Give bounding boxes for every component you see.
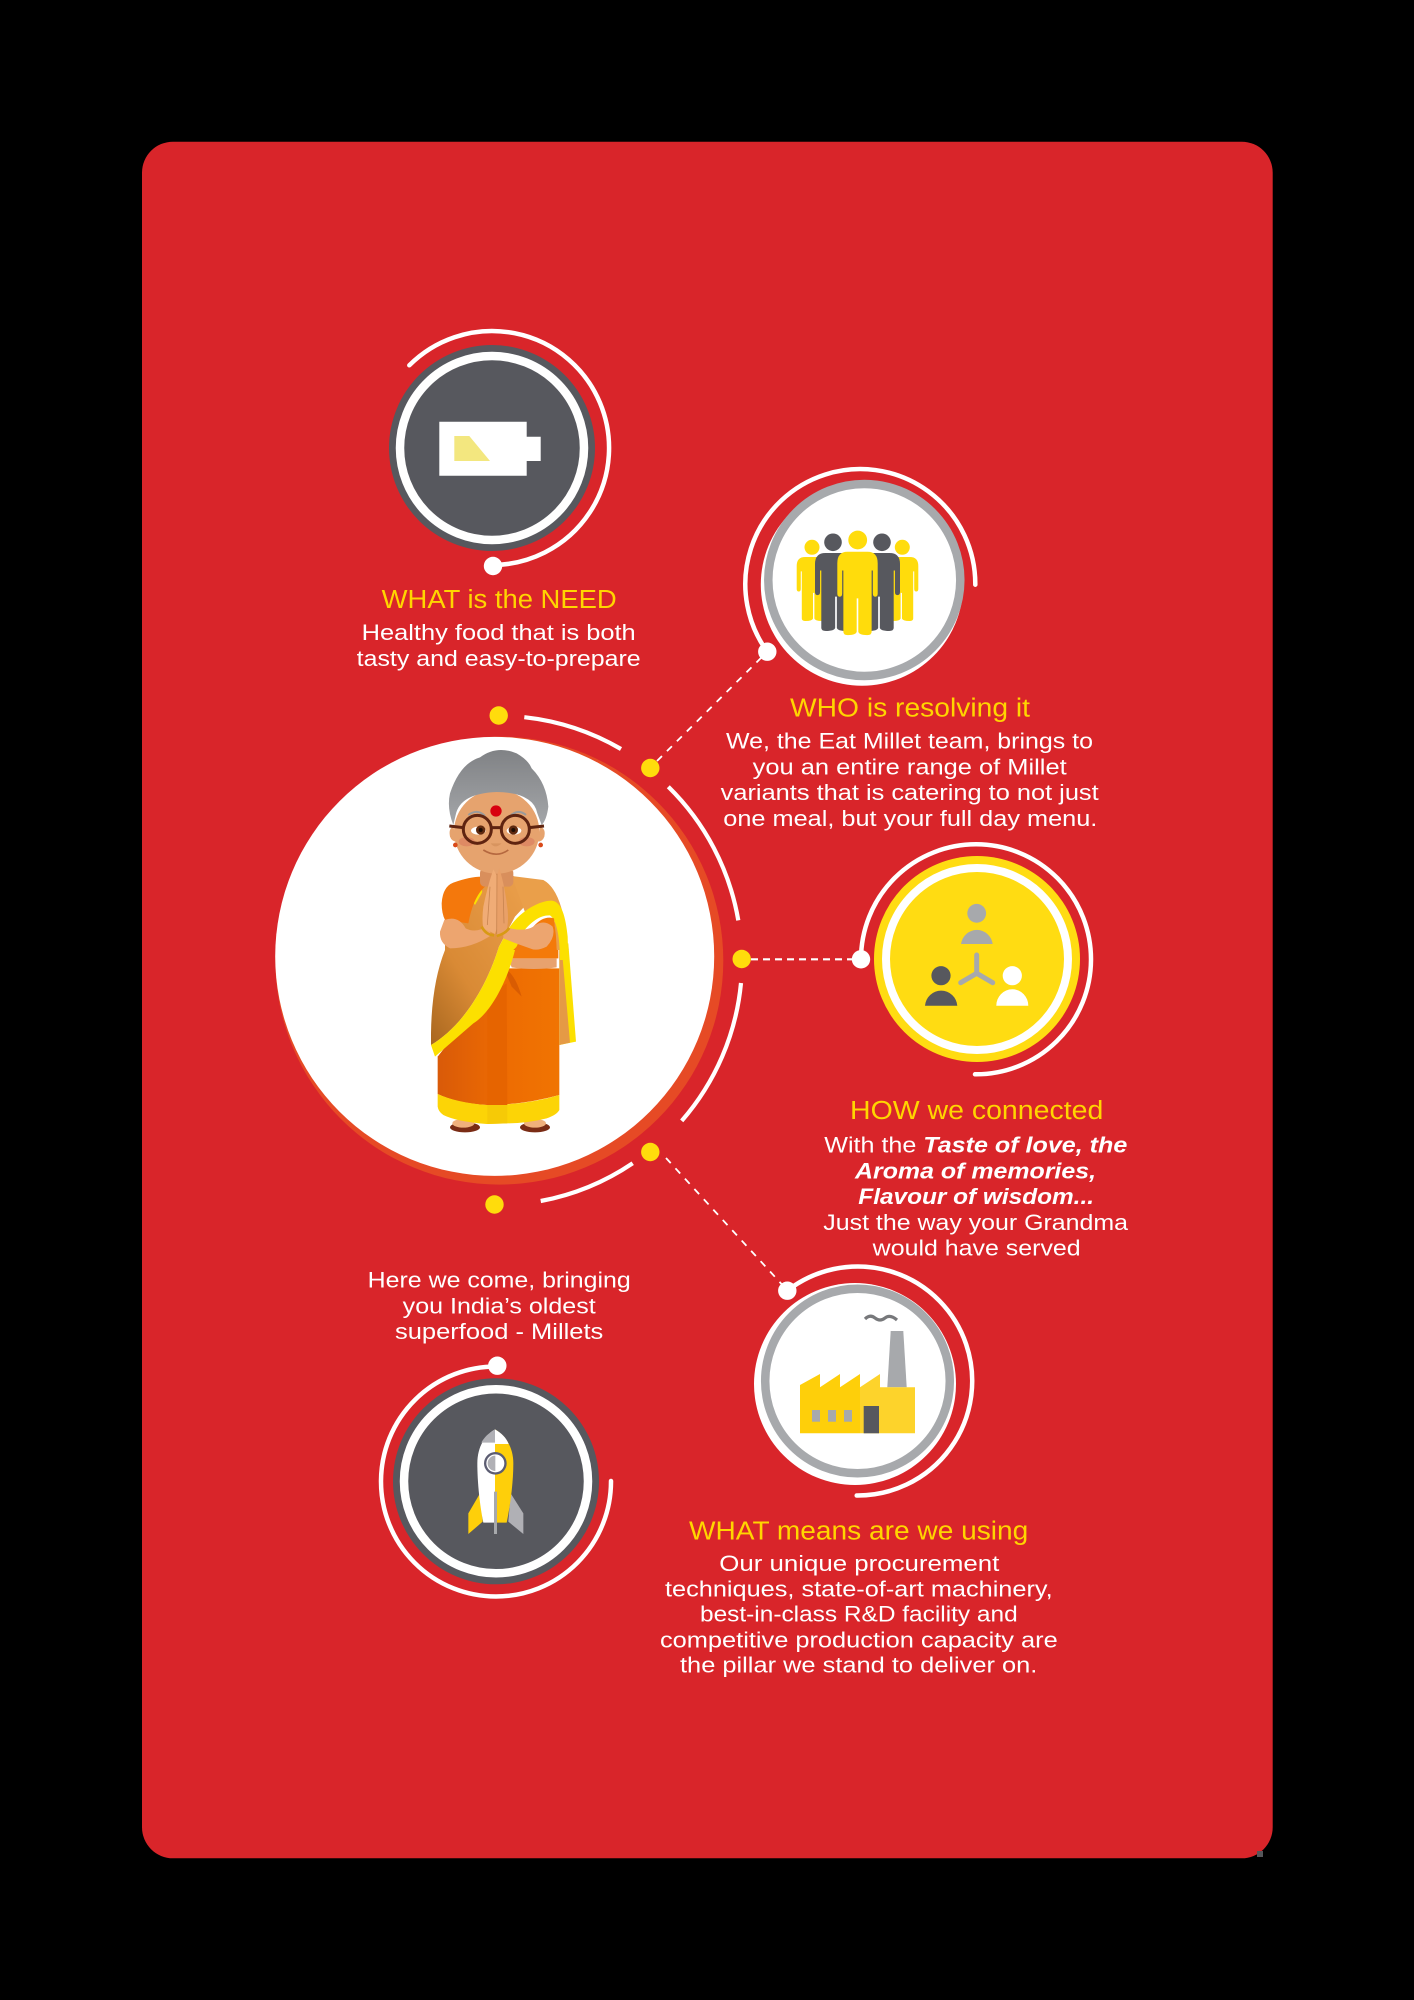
body text: We, the Eat Millet team, brings to: [726, 728, 1093, 753]
section: how we connected: [823, 844, 1129, 1261]
orbit arc and node: [852, 844, 1091, 1074]
grandma character illustration: [431, 750, 576, 1132]
corner artefact: [1257, 1851, 1263, 1857]
section: here we come: [368, 1267, 631, 1596]
heading: WHAT is the NEED: [382, 586, 617, 614]
body text: Aroma of memories,: [854, 1158, 1096, 1183]
body text: techniques, state-of-art machinery,: [665, 1577, 1053, 1602]
body text: you India’s oldest: [403, 1293, 596, 1318]
heading: WHO is resolving it: [790, 695, 1030, 723]
body text: superfood - Millets: [395, 1319, 603, 1344]
icon: rocket in dark circle: [393, 1378, 599, 1584]
body text: variants that is catering to not just: [721, 780, 1099, 805]
orbit yellow dots: [485, 706, 751, 1214]
heading: HOW we connected: [850, 1097, 1103, 1125]
body text: With the Taste of love, the: [824, 1132, 1127, 1157]
orbit arc and node: [381, 1356, 611, 1596]
body text: Just the way your Grandma: [823, 1210, 1129, 1235]
icon: factory in white circle: [754, 1283, 956, 1485]
body text: tasty and easy-to-prepare: [357, 646, 641, 671]
connector: dashed line to how: [751, 958, 861, 960]
panel: red background: [142, 142, 1273, 1858]
orbit arc and node: [409, 331, 609, 575]
central character circle: [275, 737, 723, 1185]
body text: Flavour of wisdom...: [858, 1184, 1094, 1209]
icon: connected people in yellow circle: [874, 856, 1080, 1062]
heading: WHAT means are we using: [689, 1517, 1028, 1545]
section: who is resolving it: [721, 469, 1099, 831]
body text: [660, 1551, 1058, 1678]
orbit arcs around the central circle: [524, 717, 741, 1201]
icon: team of people in white circle: [761, 483, 963, 686]
body text: would have served: [872, 1236, 1081, 1261]
body text: the pillar we stand to deliver on.: [680, 1653, 1037, 1678]
body text: Our unique procurement: [719, 1551, 999, 1576]
connector: dashed line to who: [657, 652, 767, 761]
icon: battery in dark circle: [389, 345, 595, 551]
body text: best-in-class R&D facility and: [700, 1602, 1018, 1627]
body text: [368, 1267, 631, 1344]
section: what is the need: [357, 331, 641, 671]
orbit arc and node: [778, 1267, 972, 1496]
connector: dashed line to what means: [666, 1158, 787, 1290]
body text: [721, 728, 1099, 831]
body text: [823, 1132, 1129, 1261]
orbit arc and node: [745, 469, 975, 661]
body text: [357, 620, 641, 671]
section: what means are we using: [660, 1267, 1058, 1678]
body text: one meal, but your full day menu.: [723, 806, 1097, 831]
body text: competitive production capacity are: [660, 1627, 1058, 1652]
body text: you an entire range of Millet: [753, 754, 1067, 779]
body text: Healthy food that is both: [362, 620, 636, 645]
body text: Here we come, bringing: [368, 1267, 631, 1292]
